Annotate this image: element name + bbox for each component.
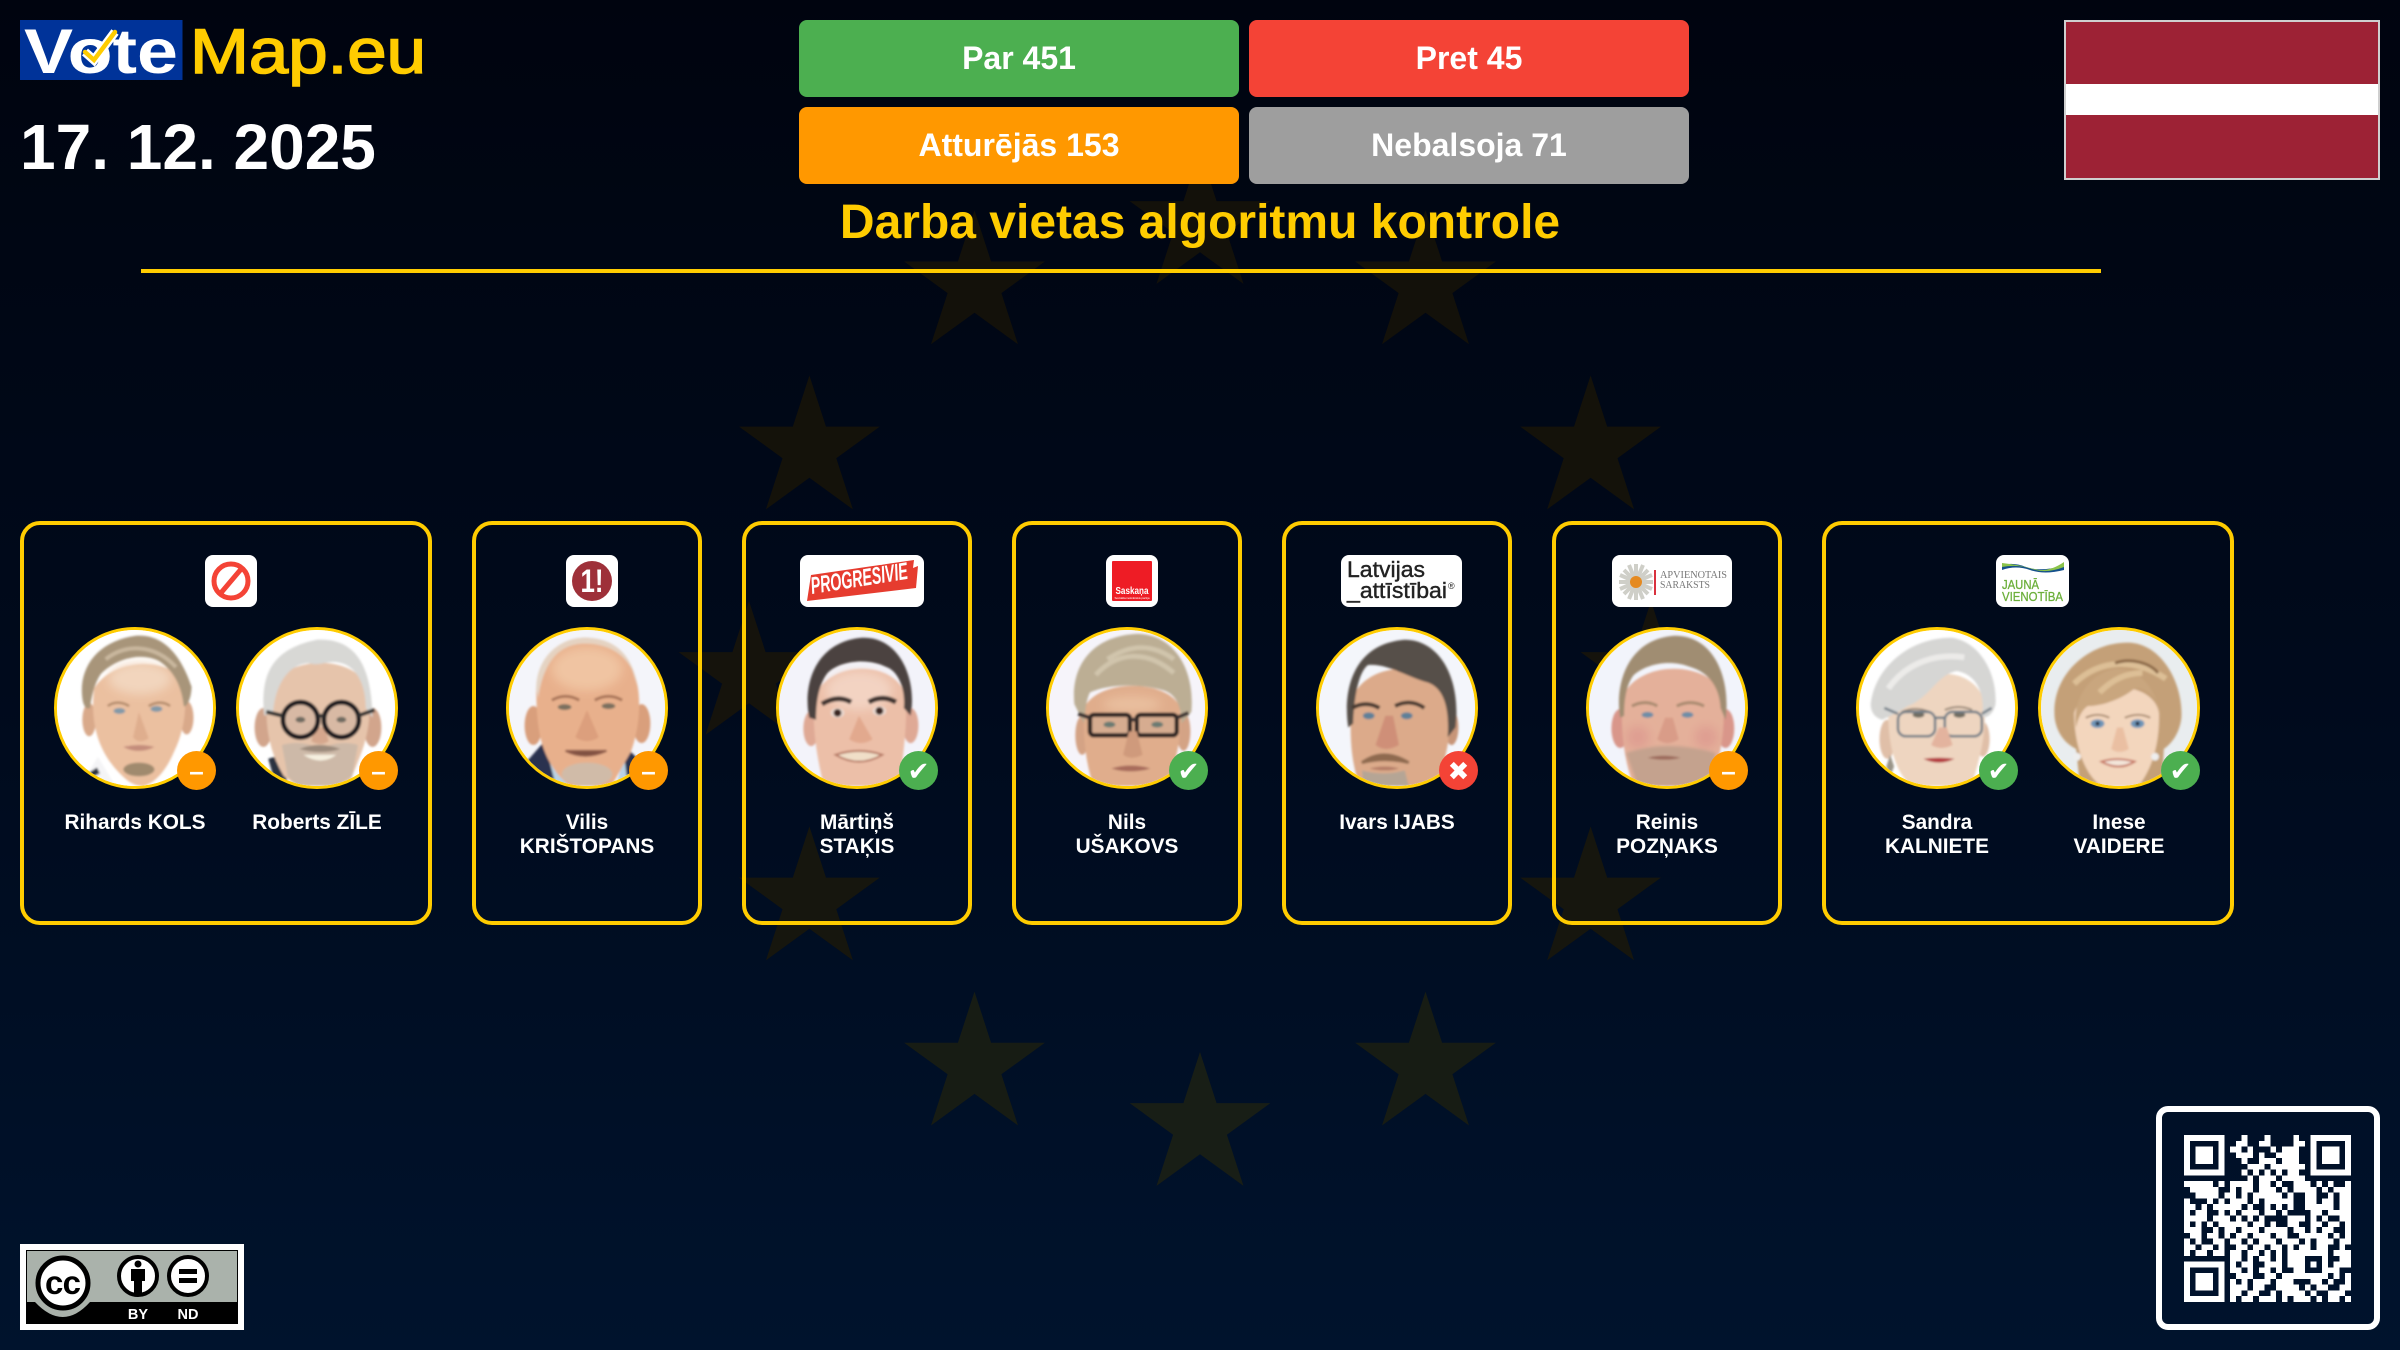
panel: United List	[1552, 521, 1782, 925]
logo: VoteMap.eu: Vote	[24, 17, 178, 87]
logo: Apvienotais saraksts: SARAKSTS	[1660, 580, 1710, 591]
name: Vilis	[566, 811, 608, 834]
logo: Apvienotais saraksts	[1612, 555, 1732, 607]
vote count: against	[1249, 20, 1689, 97]
logo: Saskaņa: Sociāldemokrātiskā partija	[1114, 596, 1150, 600]
vote badge: abstain: –	[371, 756, 386, 786]
vote badge: for: ✔	[2170, 756, 2191, 786]
panel: Latvia First	[472, 521, 702, 925]
logo: Latvijas attīstībai: ®	[1448, 581, 1455, 591]
logo: Saskaņa	[1106, 555, 1158, 607]
name	[1616, 811, 1718, 858]
logo: VoteMap.eu	[20, 17, 426, 87]
logo: VoteMap.eu: Map.eu	[190, 17, 426, 87]
vote count: abstained: Atturējās 153	[918, 127, 1119, 163]
vote badge: abstain	[177, 751, 216, 790]
logo: Latvija pirmajā vietā: 1!	[580, 563, 604, 599]
vote badge: abstain: –	[1721, 756, 1736, 786]
logo: Saskaņa: Saskaņa	[1116, 586, 1149, 597]
name: Nils	[1108, 811, 1146, 834]
flag: Latvia	[2064, 20, 2380, 180]
name	[520, 811, 654, 858]
name: KALNIETE	[1885, 835, 1989, 858]
vote badge: for	[2161, 751, 2200, 790]
name: Reinis	[1636, 811, 1698, 834]
logo: Latvijas attīstībai: _attīstībai	[1346, 578, 1447, 603]
logo: Jaunā Vienotība	[1996, 555, 2069, 607]
licence badge: CC BY-ND: ND	[178, 1307, 198, 1323]
vote badge: for: ✔	[1178, 756, 1199, 786]
vote badge: abstain	[1709, 751, 1748, 790]
logo: Jaunā Vienotība: JAUNĀ	[2002, 577, 2039, 592]
name: KRIŠTOPANS	[520, 835, 654, 858]
name: UŠAKOVS	[1076, 835, 1178, 858]
vote badge: for	[1169, 751, 1208, 790]
logo: Latvija pirmajā vietā	[566, 555, 618, 607]
name: Sandra	[1902, 811, 1972, 834]
member: Ivars Ijabs	[1316, 627, 1478, 834]
name: VAIDERE	[2074, 835, 2164, 858]
licence badge: CC BY-ND: BY	[128, 1307, 148, 1323]
vote count: did not vote: Nebalsoja 71	[1371, 127, 1567, 163]
date: 17. 12. 2025	[20, 111, 376, 183]
panel: Development/For	[1282, 521, 1512, 925]
vote badge: for	[1979, 751, 2018, 790]
vote badge: abstain: –	[189, 756, 204, 786]
logo: Apvienotais saraksts: APVIENOTAIS	[1660, 570, 1727, 581]
name: Rihards KOLS	[64, 811, 205, 834]
vote count: did not vote	[1249, 107, 1689, 184]
vote count: against: Pret 45	[1416, 40, 1522, 76]
name	[1885, 811, 1989, 858]
name: Ivars IJABS	[1339, 811, 1455, 834]
name: STAĶIS	[820, 835, 894, 858]
panel: non-attached	[20, 521, 432, 925]
logo: Latvijas attīstībai	[1341, 555, 1462, 607]
vote badge: for	[899, 751, 938, 790]
member: Roberts Zile	[236, 627, 398, 834]
member: Inese Vaidere	[2038, 627, 2200, 858]
title: Darba vietas algoritmu kontrole	[840, 196, 1560, 249]
vote badge: against: ✖	[1448, 756, 1469, 786]
name	[820, 811, 894, 858]
logo: no party	[205, 555, 257, 607]
vote badge: abstain: –	[641, 756, 656, 786]
name	[2074, 811, 2164, 858]
vote badge: abstain	[359, 751, 398, 790]
logo: Latvijas attīstībai: Latvijas	[1347, 557, 1425, 582]
licence badge: CC BY-ND	[20, 1244, 244, 1330]
vote count: for: Par 451	[962, 40, 1076, 76]
vote badge: for: ✔	[908, 756, 929, 786]
panel: Harmony	[1012, 521, 1242, 925]
name	[1076, 811, 1178, 858]
name: Inese	[2092, 811, 2146, 834]
panel: New Unity	[1822, 521, 2234, 925]
member: Vilis Kristopans	[506, 627, 668, 858]
name: Roberts ZĪLE	[252, 811, 382, 834]
member: Nils Usakovs	[1046, 627, 1208, 858]
vote badge: for: ✔	[1988, 756, 2009, 786]
licence badge: CC BY-ND: cc	[45, 1264, 81, 1301]
panel: Progressives	[742, 521, 972, 925]
member: Reinis Poznaks	[1586, 627, 1748, 858]
QR code	[2156, 1106, 2380, 1330]
member: Rihards Kols	[54, 627, 216, 834]
vote count: for	[799, 20, 1239, 97]
name: POZŅAKS	[1616, 835, 1718, 858]
member: Martins Stakis	[776, 627, 938, 858]
vote count: abstained	[799, 107, 1239, 184]
vote badge: abstain	[629, 751, 668, 790]
member: Sandra Kalniete	[1856, 627, 2018, 858]
vote badge: against	[1439, 751, 1478, 790]
name: Mārtiņš	[820, 811, 894, 834]
